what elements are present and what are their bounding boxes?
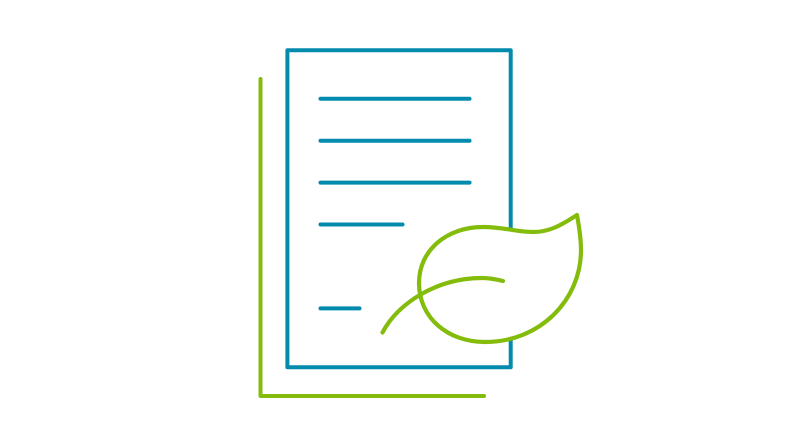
icon: leaf [382,215,581,342]
icon: document page [287,50,511,367]
leaf stem [382,278,503,332]
leaf outline [419,215,581,342]
icon: document text lines [320,99,470,308]
icon: back page outline [260,79,484,396]
